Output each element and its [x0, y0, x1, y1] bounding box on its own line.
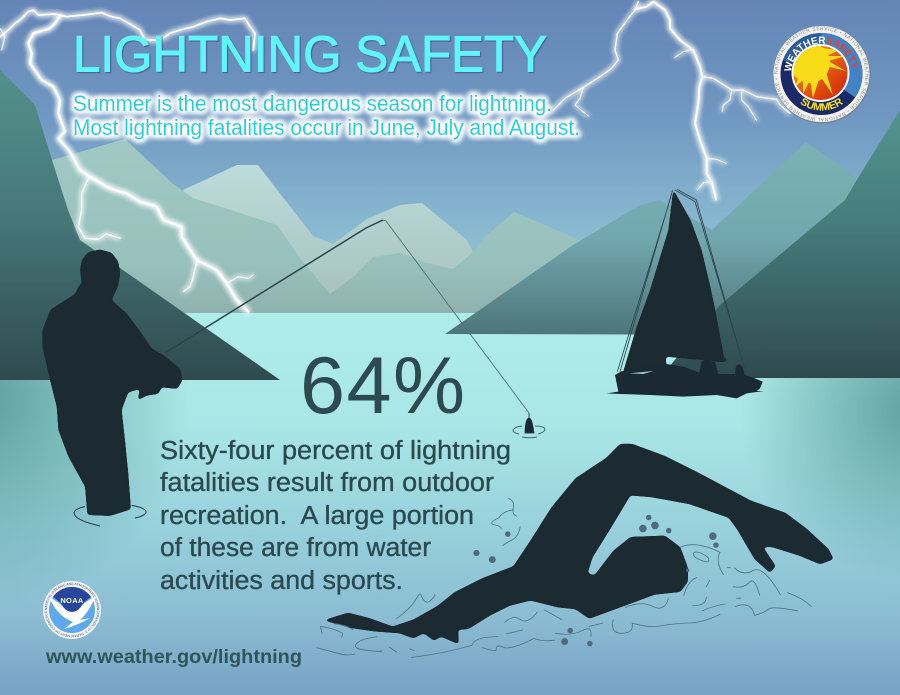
swimmer silhouette: [317, 444, 834, 657]
dark mountain left: [0, 70, 280, 380]
water droplets: [473, 515, 719, 646]
mountains: pale front range: [52, 139, 580, 313]
body text: fatalities result from outdoor: [160, 469, 495, 497]
lightning bolt left: [0, 10, 255, 312]
water ripples around wader: [74, 505, 146, 526]
badge sun rays: [794, 46, 846, 98]
subtitle: Most lightning fatalities occur in June, July and August.: [73, 115, 580, 140]
dark mountain right: [660, 110, 900, 378]
fisherman silhouette: [42, 249, 183, 526]
NOAA bird swoosh: [49, 597, 95, 629]
badge lettering: WEATHERSAFETY: [784, 36, 858, 70]
NOAA logo: NOAA: [60, 596, 84, 605]
body text: activities and sports.: [160, 567, 403, 595]
percentage: 64%: [300, 341, 465, 431]
NOAA logo: [43, 581, 101, 639]
title: LIGHTNING SAFETY: [73, 26, 547, 82]
cabin window: [629, 371, 653, 374]
subtitle: [73, 91, 580, 140]
badge: weather safety summer: [774, 26, 870, 124]
badge ring text: NATIONAL WEATHER SERVICE • NATIONAL WEATHER SERVICE • NATIONAL WEATHER SERVICE •: [774, 26, 869, 122]
rigging: [617, 189, 747, 375]
bobber ripples: [513, 426, 545, 438]
sailboat silhouette: [607, 189, 764, 398]
website url: www.weather.gov/lightning: [45, 647, 302, 668]
mountain behind the sailboat: [445, 142, 858, 335]
water: [0, 313, 900, 695]
splash lines: [317, 498, 811, 657]
body text: of these are from water: [160, 534, 432, 562]
sky background: [0, 0, 900, 320]
lightning bolt right: [553, 2, 790, 199]
mountains: pale back range: [183, 165, 473, 300]
body text: [160, 437, 511, 595]
subtitle: Summer is the most dangerous season for lightning.: [73, 91, 552, 116]
badge: weather safety summer: SUMMER: [800, 98, 844, 111]
bobber: [525, 413, 534, 433]
body text: Sixty-four percent of lightning: [160, 437, 511, 465]
NOAA ring text: NATIONAL OCEANIC AND ATMOSPHERIC ADMINISTRATION • U.S. DEPARTMENT OF COMMERCE: [44, 582, 100, 638]
fishing rod and line: [165, 220, 545, 438]
body text: recreation. A large portion: [160, 502, 474, 530]
